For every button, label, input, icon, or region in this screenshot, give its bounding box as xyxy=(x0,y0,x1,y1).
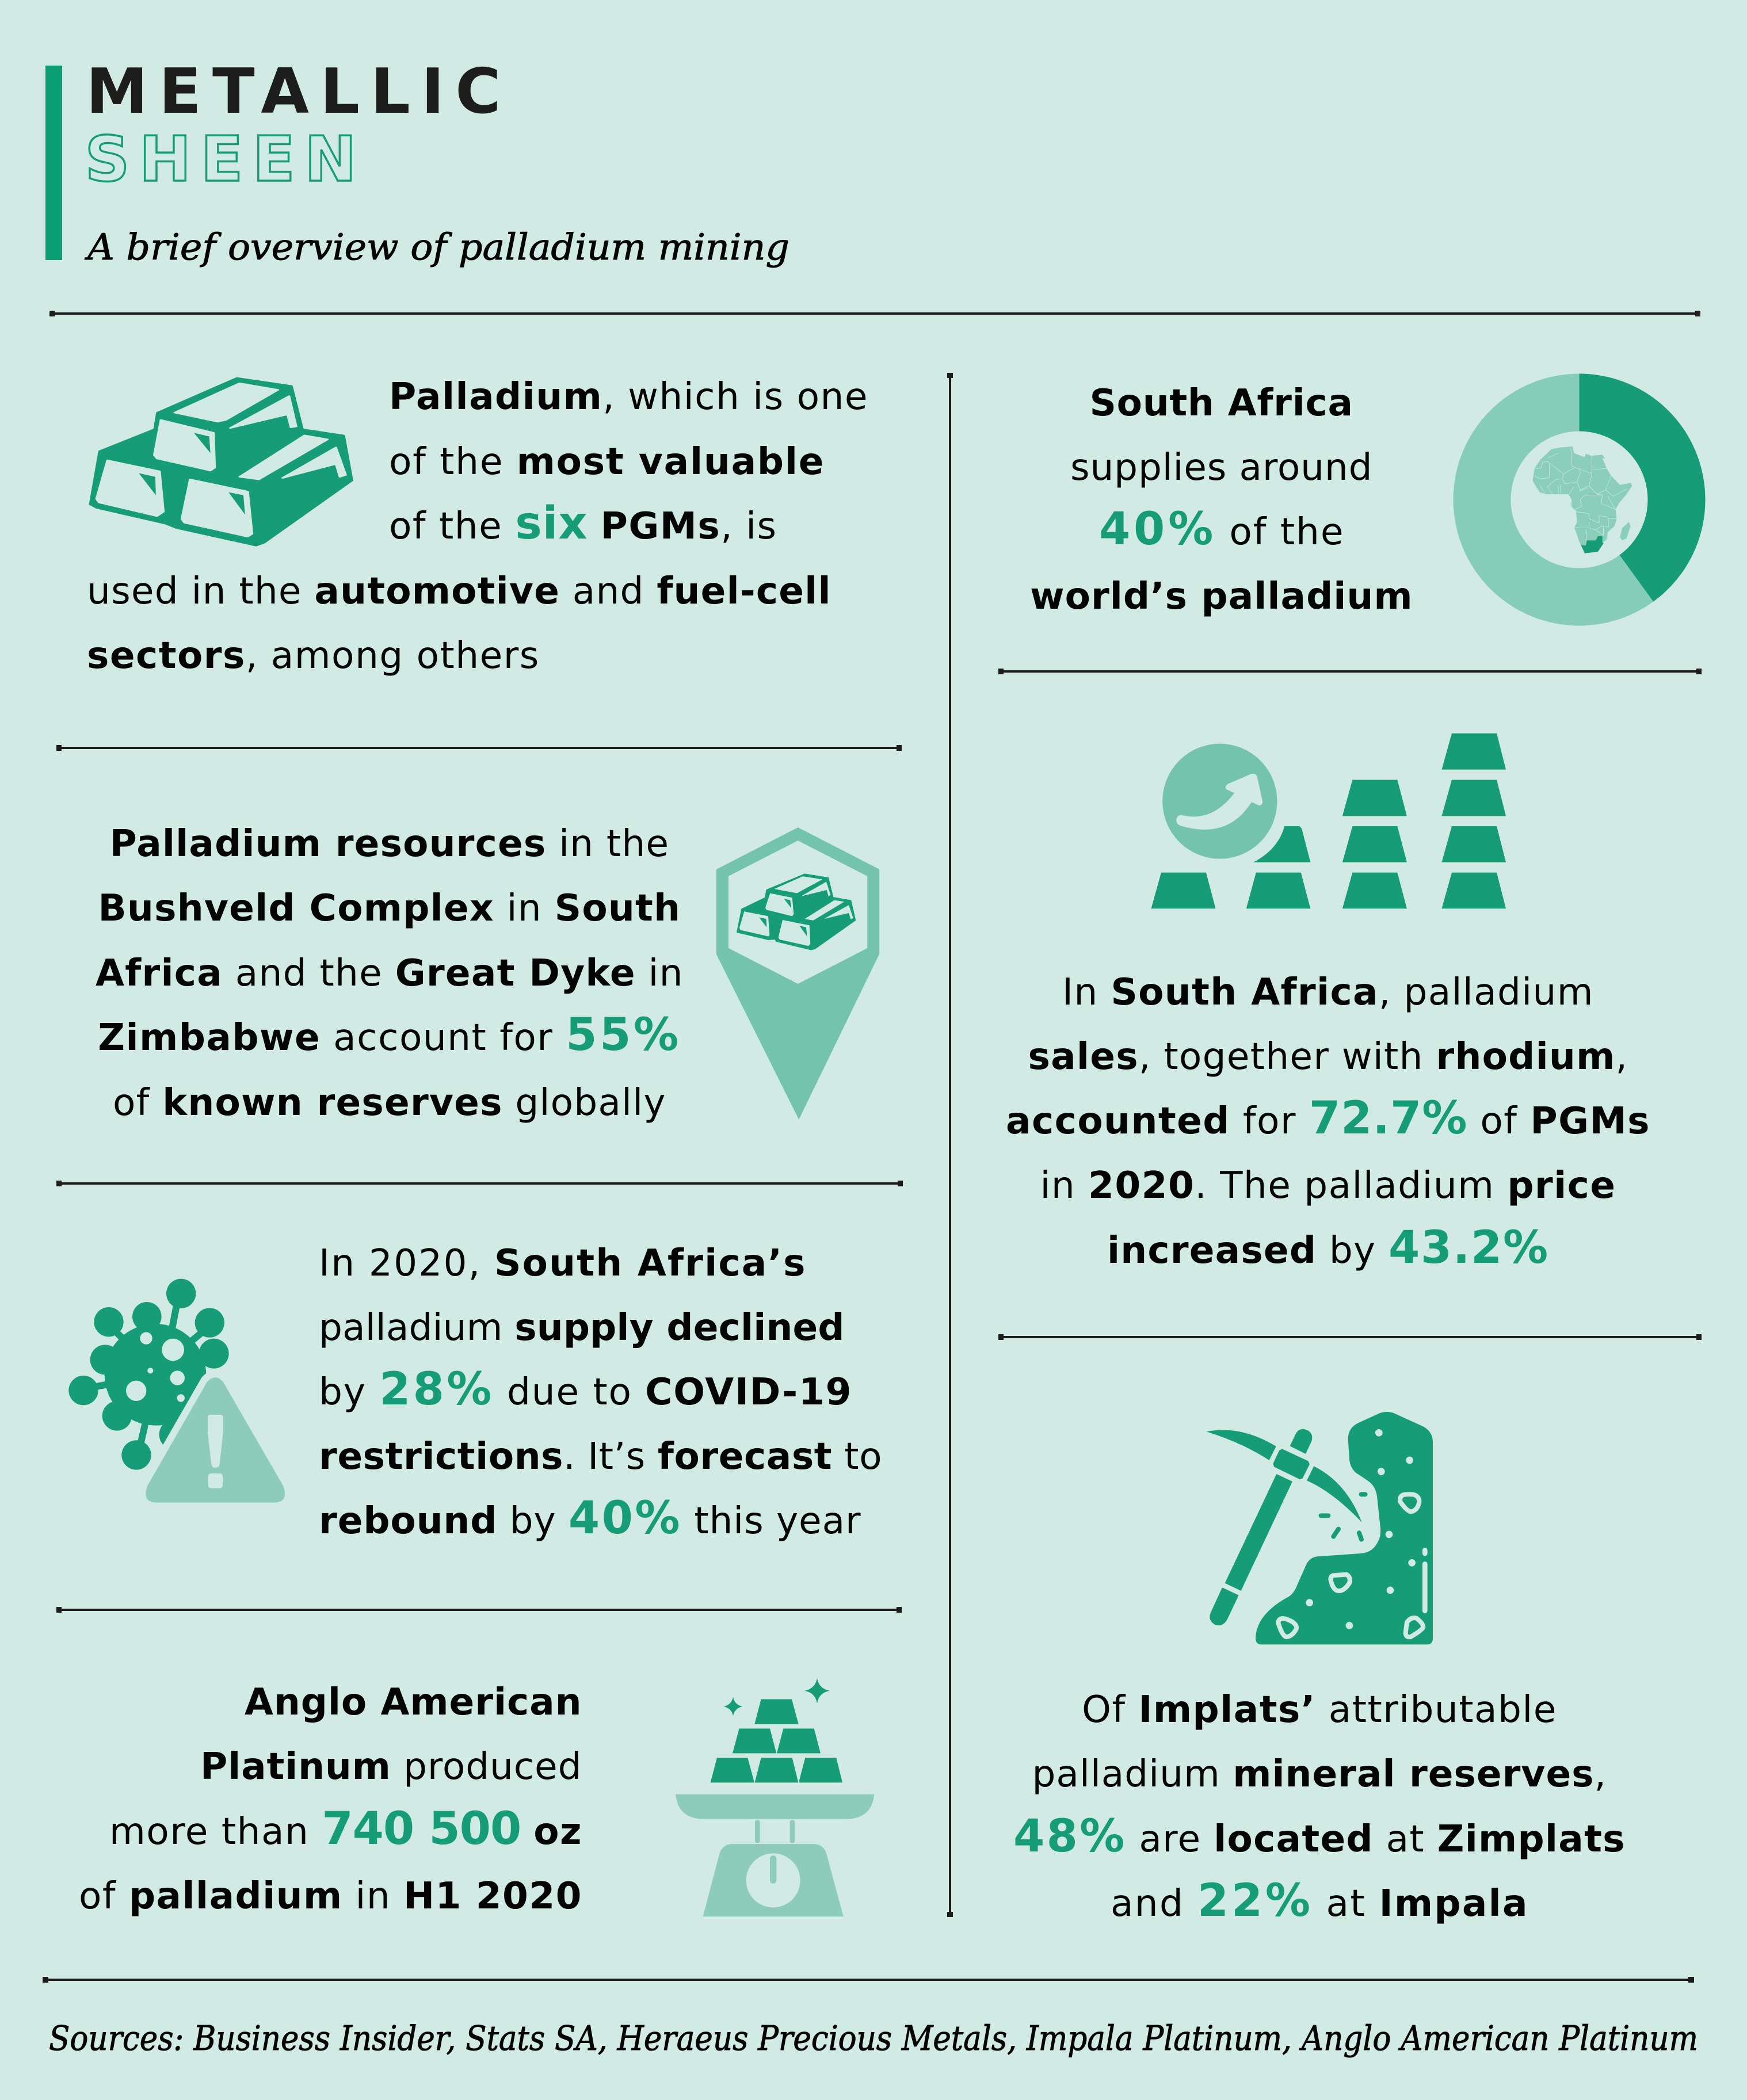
text: anglo american platinum: more than 740 500 oz xyxy=(109,1803,582,1855)
text: implats reserves: palladium mineral reserves, xyxy=(1032,1752,1607,1796)
icon: africa map xyxy=(1532,446,1632,553)
subtitle: A brief overview of palladium mining xyxy=(85,226,789,268)
text: palladium intro: of the most valuable xyxy=(389,440,825,483)
text: palladium resources: Africa and the Great Dyke in xyxy=(96,952,684,995)
icon: virus with warning triangle xyxy=(68,1279,285,1503)
title block xyxy=(45,56,789,268)
title accent bar xyxy=(45,66,62,260)
text: anglo american platinum: Anglo American xyxy=(245,1681,582,1724)
text: south africa share: supplies around xyxy=(1070,446,1373,489)
text: anglo american platinum xyxy=(79,1681,582,1918)
text: palladium intro: of the six PGMs, is xyxy=(389,498,777,549)
text: covid supply decline: restrictions. It’s forecast to xyxy=(319,1435,883,1478)
text: palladium intro: used in the automotive and fuel-cell xyxy=(87,570,831,613)
text: anglo american platinum: of palladium in H1 2020 xyxy=(79,1874,582,1918)
text: covid supply decline: In 2020, South Africa’s xyxy=(319,1242,806,1285)
text: sales and price xyxy=(1006,971,1650,1274)
text: sales and price: in 2020. The palladium price xyxy=(1040,1164,1616,1207)
text: south africa share: world’s palladium xyxy=(1030,575,1413,618)
icon: gold bars xyxy=(90,378,352,546)
text: palladium resources: Palladium resources in the xyxy=(109,822,670,865)
title: METALLIC: METALLIC xyxy=(86,56,501,128)
text: palladium intro: sectors, among others xyxy=(87,634,540,677)
text: sales and price: In South Africa, palladium xyxy=(1062,971,1594,1014)
donut chart: south africa 40% share xyxy=(1454,373,1706,626)
text: implats reserves xyxy=(1013,1688,1626,1927)
icon: pickaxe and rock xyxy=(1207,1412,1433,1644)
text: palladium resources xyxy=(96,822,684,1124)
text: sales and price: sales, together with rhodium, xyxy=(1028,1035,1628,1078)
text: palladium intro xyxy=(87,375,868,677)
text: covid supply decline: palladium supply declined xyxy=(319,1306,845,1349)
text: sales and price: increased by 43.2% xyxy=(1107,1222,1549,1274)
icon: scale with bars xyxy=(676,1678,874,1916)
text: palladium resources: of known reserves globally xyxy=(113,1081,666,1124)
text: implats reserves: Of Implats’ attributable xyxy=(1082,1688,1557,1731)
text: south africa share xyxy=(1030,381,1413,618)
text: sales and price: accounted for 72.7% of PGMs xyxy=(1006,1093,1650,1144)
icon: map pin with bars xyxy=(716,827,879,1120)
text: implats reserves: and 22% at Impala xyxy=(1111,1875,1528,1927)
text: palladium intro: Palladium, which is one xyxy=(389,375,868,418)
title: SHEEN: SHEEN xyxy=(85,124,357,196)
text: covid supply decline: by 28% due to COVID-19 xyxy=(319,1364,852,1415)
text: implats reserves: 48% are located at Zimplats xyxy=(1013,1811,1626,1862)
text: covid supply decline: rebound by 40% this year xyxy=(319,1492,861,1544)
text: palladium resources: Zimbabwe account for 55% xyxy=(98,1009,681,1061)
text: south africa share: 40% of the xyxy=(1099,503,1344,555)
icon: rising bars with arrow xyxy=(1151,734,1506,908)
text: palladium resources: Bushveld Complex in South xyxy=(98,887,681,930)
text: south africa share: South Africa xyxy=(1090,381,1353,425)
dividers xyxy=(43,311,1702,1983)
text: anglo american platinum: Platinum produced xyxy=(200,1745,582,1788)
text: covid supply decline xyxy=(319,1242,883,1544)
